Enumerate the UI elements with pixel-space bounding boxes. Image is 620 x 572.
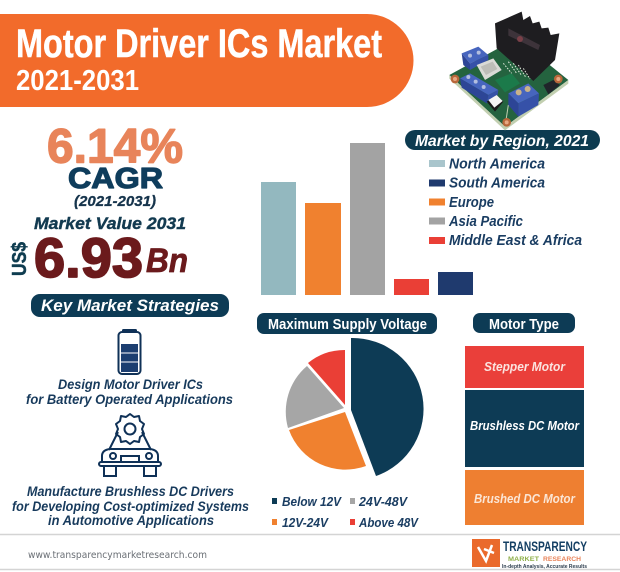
logo tagline: In-depth Analysis, Accurate Results [502, 564, 587, 570]
strategy text: automotive: in Automotive Applications [48, 513, 214, 528]
CAGR value: 6.14% [47, 120, 183, 174]
bar: south america [438, 272, 473, 295]
logo: transparency market research [472, 538, 587, 570]
green component area [495, 73, 520, 92]
legend: supply voltage [272, 495, 420, 530]
segment: stepper motor [465, 346, 584, 388]
slice: 12V-24V [289, 412, 366, 470]
strategy text: automotive: for Developing Cost-optimized Systems [12, 499, 249, 514]
legend item: above 48V: Above 48V [358, 516, 420, 530]
heading: maximum supply voltage [257, 313, 437, 334]
bar chart: market by region [261, 143, 473, 295]
market value unit: Bn [146, 242, 188, 280]
legend item: below 12V: Below 12V [282, 495, 343, 509]
strategy text: battery [26, 377, 233, 407]
bar: europe [305, 203, 341, 295]
slice: 24V-48V [286, 366, 344, 428]
strategy text: automotive [12, 484, 249, 528]
legend item: europe [429, 194, 494, 211]
segment: brushless DC motor [465, 390, 584, 467]
segment: brushed DC motor [465, 470, 584, 525]
product image: motor driver board [449, 12, 568, 130]
logo name: TRANSPARENCY [503, 538, 587, 554]
logo sub-name: MARKET [508, 556, 539, 563]
stacked block: motor type [465, 346, 584, 525]
mounting holes [451, 75, 459, 83]
segment: stepper motor: Stepper Motor [484, 360, 566, 374]
segment: brushless DC motor: Brushless DC Motor [470, 419, 580, 433]
legend item: middle east and africa: Middle East & Africa [449, 232, 582, 249]
footer rules [0, 534, 620, 570]
slice: below 12V [351, 338, 424, 476]
legend item: europe: Europe [449, 194, 494, 211]
pie chart: maximum supply voltage [286, 338, 424, 476]
legend item: 24V-48V: 24V-48V [358, 495, 409, 509]
market value label: Market Value 2031 [34, 214, 186, 233]
white connector [477, 58, 502, 80]
heading: market by region: Market by Region, 2021 [415, 133, 589, 150]
CAGR and market value block [9, 120, 188, 289]
market value figure: 6.93 [34, 226, 143, 289]
heading: motor type: Motor Type [489, 317, 559, 333]
legend item: 12V-24V: 12V-24V [282, 516, 330, 530]
pins [503, 62, 530, 79]
blue terminal: right [508, 83, 539, 117]
icon: battery [118, 329, 140, 374]
blue terminal: top left [462, 47, 488, 70]
slice: above 48V [308, 350, 345, 405]
strategy text: automotive: Manufacture Brushless DC Drivers [27, 484, 234, 499]
heading: key market strategies: Key Market Strategies [41, 296, 219, 315]
legend item: north america: North America [449, 156, 545, 172]
CAGR period: (2021-2031) [74, 193, 156, 210]
segment: brushed DC motor: Brushed DC Motor [474, 492, 576, 506]
pcb [449, 38, 568, 127]
legend item: south america: South America [449, 174, 545, 192]
bar: north america [261, 182, 296, 295]
bar: middle east and africa [394, 279, 429, 295]
title banner [0, 14, 414, 107]
icon: car with gear [99, 414, 161, 476]
footer website: www.transparencymarketresearch.com [28, 550, 207, 561]
logo mark [472, 539, 500, 567]
heading: maximum supply voltage: Maximum Supply Voltage [268, 317, 427, 333]
title: Motor Driver ICs Market [16, 22, 382, 66]
strategy text: battery: for Battery Operated Applications [26, 392, 233, 407]
strategy text: battery: Design Motor Driver ICs [58, 377, 203, 392]
white component [487, 95, 503, 112]
CAGR label: CAGR [68, 163, 163, 195]
heading: motor type [473, 313, 575, 333]
currency: US$ [9, 242, 31, 276]
heatsink [495, 12, 559, 81]
legend item: asia pacific: Asia Pacific [448, 213, 524, 230]
bar: asia pacific [350, 143, 385, 295]
subtitle: years: 2021-2031 [16, 65, 139, 97]
legend: regions [429, 156, 582, 249]
logo: transparency market research: RESEARCH [543, 556, 581, 563]
blue terminal: lower left [460, 73, 498, 103]
black header [543, 80, 560, 94]
